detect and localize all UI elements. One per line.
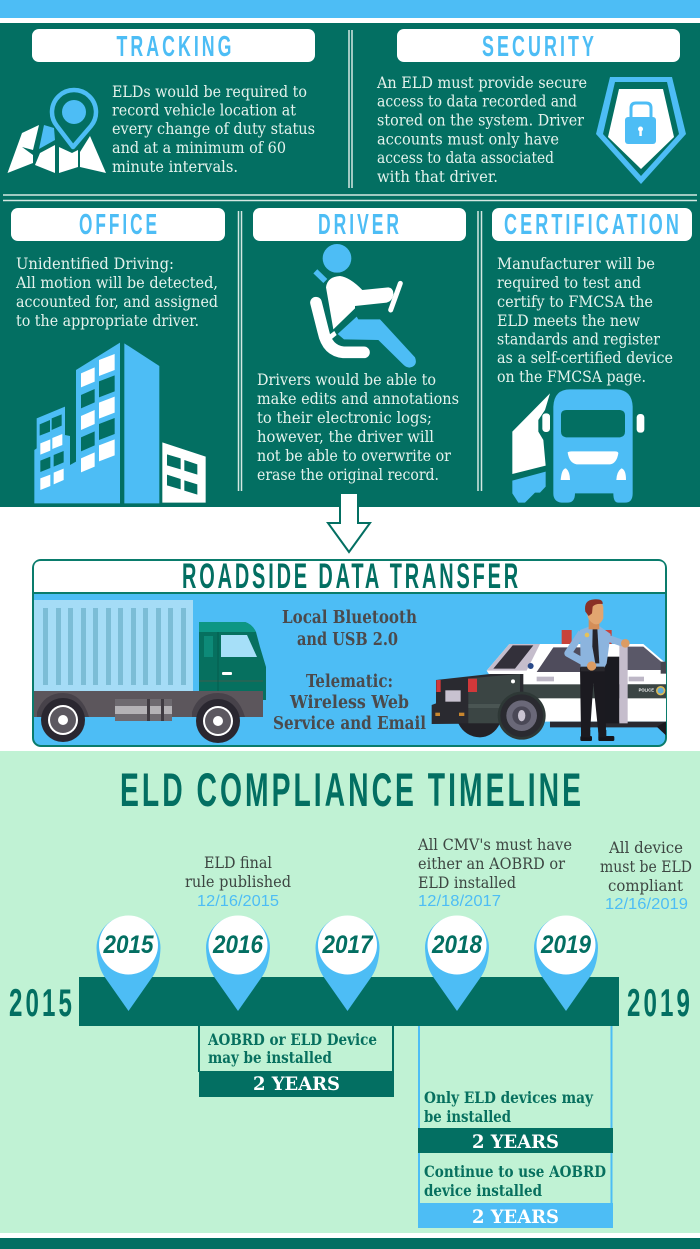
text: data transfer methods: Wireless Web bbox=[289, 693, 409, 713]
heading: office: OFFICE bbox=[79, 209, 160, 241]
text: tracking bbox=[112, 82, 315, 176]
period: continue AOBRD: device installed bbox=[424, 1181, 542, 1200]
icon: office buildings bbox=[34, 343, 206, 503]
heading: security: SECURITY bbox=[482, 31, 597, 63]
heading: driver: DRIVER bbox=[318, 209, 402, 241]
panel: roadside data transfer bbox=[33, 557, 666, 746]
heading: office bbox=[11, 208, 225, 241]
text: certification bbox=[497, 254, 673, 386]
icon: map with pin bbox=[8, 90, 106, 173]
text: security bbox=[376, 73, 587, 186]
period: continue AOBRD bbox=[418, 1162, 613, 1228]
period: only ELD devices: 2 YEARS bbox=[472, 1131, 559, 1153]
period: AOBRD or ELD device bbox=[199, 1030, 394, 1097]
event: all devices compliant: 12/16/2019 bbox=[605, 896, 688, 913]
text: tracking: record vehicle location at bbox=[112, 100, 296, 120]
text: tracking: minute intervals. bbox=[112, 157, 238, 176]
heading: security bbox=[397, 29, 680, 63]
illustration: police car and officer: POLICE bbox=[639, 688, 654, 693]
icon: semi truck bbox=[512, 389, 644, 503]
text: security: An ELD must provide secure bbox=[376, 73, 587, 92]
event: final rule published bbox=[185, 853, 291, 910]
text: certification: ELD meets the new bbox=[497, 311, 640, 330]
event: all devices compliant: compliant bbox=[608, 876, 684, 895]
panel: office bbox=[11, 208, 225, 503]
footer band bbox=[0, 1238, 700, 1249]
panel: security bbox=[376, 29, 686, 186]
text: office bbox=[15, 254, 218, 330]
text: certification: Manufacturer will be bbox=[497, 254, 655, 273]
text: office: to the appropriate driver. bbox=[16, 311, 199, 330]
text: security: with that driver. bbox=[377, 167, 498, 186]
text: tracking: every change of duty status bbox=[112, 119, 315, 138]
pin: 2017 bbox=[316, 916, 380, 1011]
pin: 2015: 2015 bbox=[103, 931, 154, 959]
event: AOBRD or ELD installed bbox=[417, 835, 572, 910]
text: office: All motion will be detected, bbox=[15, 273, 218, 292]
text: driver: Drivers would be able to bbox=[257, 370, 436, 389]
text: office: Unidentified Driving: bbox=[16, 254, 174, 273]
illustration: police car and officer bbox=[432, 599, 666, 741]
label: start year 2015: 2015 bbox=[9, 982, 75, 1025]
event: AOBRD or ELD installed: either an AOBRD or bbox=[418, 854, 565, 873]
text: certification: certify to FMCSA the bbox=[497, 292, 653, 311]
text: data transfer methods: and USB 2.0 bbox=[297, 630, 398, 650]
heading: driver bbox=[253, 208, 466, 241]
event: AOBRD or ELD installed: 12/18/2017 bbox=[418, 893, 501, 910]
text: data transfer methods bbox=[273, 608, 426, 734]
text: data transfer methods: Local Bluetooth bbox=[282, 608, 417, 628]
panel: driver bbox=[253, 208, 466, 484]
pin: 2016: 2016 bbox=[212, 931, 264, 959]
pin: 2015 bbox=[96, 916, 160, 1011]
pin: 2017: 2017 bbox=[322, 931, 373, 959]
text: driver: erase the original record. bbox=[257, 465, 439, 484]
period: continue AOBRD: 2 YEARS bbox=[472, 1206, 559, 1228]
pin: 2019: 2019 bbox=[540, 931, 591, 959]
text: certification: required to test and bbox=[497, 273, 641, 292]
pin: 2016 bbox=[206, 916, 270, 1011]
period: only ELD devices: Only ELD devices may bbox=[424, 1088, 594, 1107]
top banner bbox=[0, 0, 700, 18]
connector: lines below timeline bbox=[199, 1026, 612, 1228]
period: only ELD devices: be installed bbox=[424, 1107, 511, 1126]
heading: tracking bbox=[32, 29, 315, 63]
pin: 2018: 2018 bbox=[431, 931, 482, 959]
text: security: stored on the system. Driver bbox=[377, 110, 584, 130]
text: certification: standards and register bbox=[497, 330, 660, 348]
event: AOBRD or ELD installed: ELD installed bbox=[418, 873, 516, 892]
event: all devices compliant: All device bbox=[608, 838, 683, 857]
timeline bar bbox=[79, 977, 619, 1026]
text: certification: on the FMCSA page. bbox=[497, 367, 646, 386]
text: certification: as a self-certified device bbox=[497, 348, 673, 367]
heading: tracking: TRACKING bbox=[116, 31, 234, 63]
pin: 2018 bbox=[425, 916, 489, 1011]
arrow: down to roadside data transfer bbox=[328, 493, 370, 552]
period: AOBRD or ELD device: may be installed bbox=[208, 1048, 332, 1067]
event: final rule published: rule published bbox=[185, 872, 291, 891]
text: data transfer methods: Telematic: bbox=[306, 672, 393, 692]
text: security: access to data associated bbox=[377, 148, 554, 167]
event: AOBRD or ELD installed: All CMV's must have bbox=[417, 835, 572, 854]
text: driver: not be able to overwrite or bbox=[257, 446, 451, 465]
text: tracking: ELDs would be required to bbox=[112, 82, 307, 101]
text: driver: however, the driver will bbox=[257, 427, 434, 446]
text: driver: make edits and annotations bbox=[257, 389, 459, 408]
text: data transfer methods: Service and Email bbox=[273, 714, 426, 734]
text: driver: to their electronic logs; bbox=[257, 408, 432, 427]
event: all devices compliant bbox=[600, 838, 692, 913]
text: security: accounts must only have bbox=[377, 130, 559, 148]
text: tracking: and at a minimum of 60 bbox=[112, 138, 286, 157]
panel: certification bbox=[492, 208, 692, 503]
period: continue AOBRD: Continue to use AOBRD bbox=[424, 1162, 606, 1181]
text: office: accounted for, and assigned bbox=[16, 292, 218, 311]
illustration: box truck bbox=[33, 600, 266, 743]
text: security: access to data recorded and bbox=[377, 92, 577, 110]
panel: compliance timeline background bbox=[0, 751, 700, 1233]
icon: shield with padlock bbox=[596, 77, 686, 184]
period: AOBRD or ELD device: AOBRD or ELD Device bbox=[207, 1030, 377, 1049]
period: AOBRD or ELD device: 2 YEARS bbox=[253, 1073, 340, 1095]
icon: seated driver with seat belt bbox=[315, 244, 416, 368]
period: only ELD devices bbox=[418, 1088, 613, 1153]
pin: 2019 bbox=[534, 916, 598, 1011]
event: final rule published: ELD final bbox=[204, 853, 272, 872]
green feature panel bbox=[0, 23, 700, 507]
text: driver bbox=[257, 370, 459, 484]
event: final rule published: 12/16/2015 bbox=[197, 893, 279, 910]
panel: tracking bbox=[8, 29, 315, 176]
